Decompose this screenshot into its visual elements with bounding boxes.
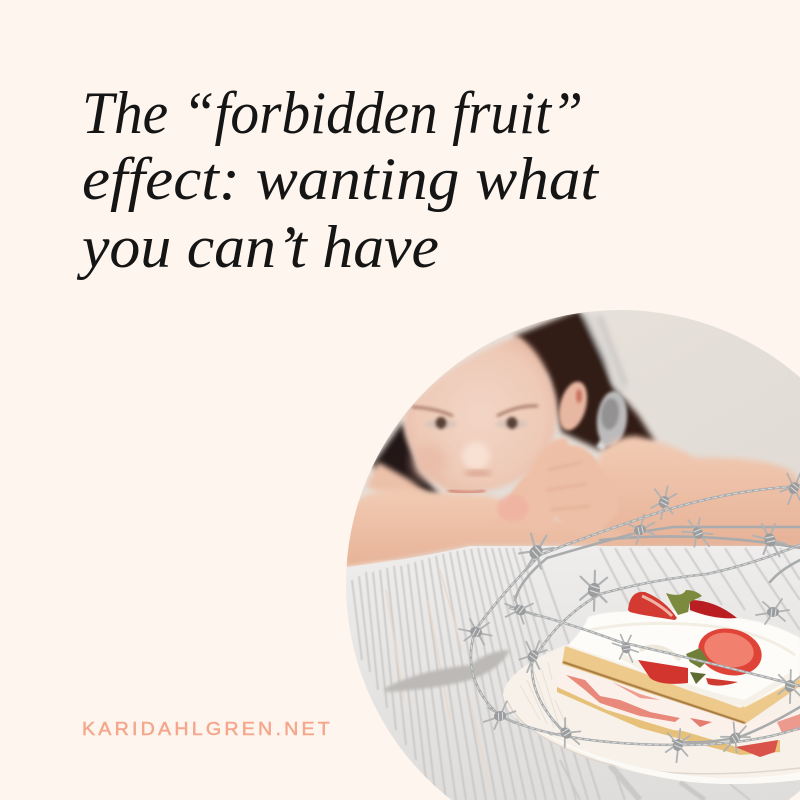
cake [557,590,800,757]
back strawberry left [628,592,677,620]
hands [498,437,602,528]
title: effect: wanting what [82,146,599,212]
mouth [448,490,485,492]
upper sponge [562,646,800,724]
barbed wire [456,468,800,765]
eyes and brows [412,406,538,429]
far arm [598,436,800,548]
plate [503,640,800,784]
title [76,80,599,280]
title: you can’t have [76,214,439,280]
whipped cream [568,611,800,707]
nose and cheeks shading [462,442,490,470]
website label: KARIDAHLGREN.NET [82,718,333,739]
strawberry cream layer [557,686,684,732]
wire shadow [385,650,510,692]
back strawberry right [690,600,737,618]
strawberry leaves [666,590,702,615]
title: The “forbidden fruit” [82,80,583,146]
wall background [340,300,800,560]
child [340,310,800,568]
ear [557,379,590,432]
lower sponge [557,686,780,755]
face [404,336,557,493]
fallen strawberry [735,740,778,757]
wooden table [340,546,800,800]
spoon [594,390,630,452]
warm streaks [386,570,490,790]
lower strawberry [638,660,688,684]
photo: child looking at fenced cake [340,300,800,800]
near arm [340,490,640,568]
strawberry slice [698,628,762,676]
near shoulder [366,462,430,500]
